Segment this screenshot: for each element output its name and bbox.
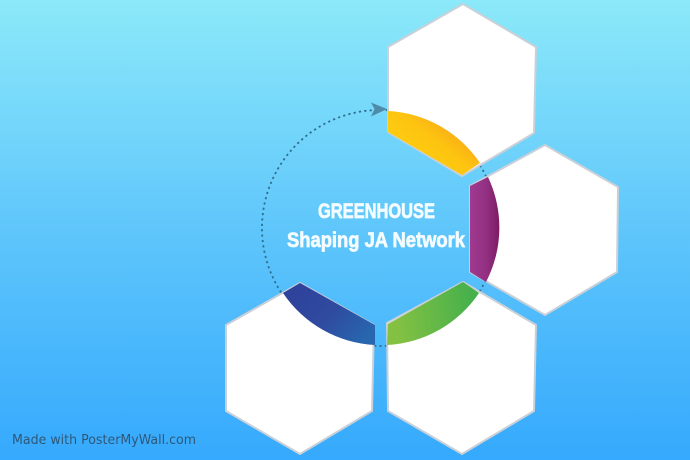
- hexagon: bottom left: [226, 283, 374, 454]
- subtitle: Shaping JA Network: [287, 229, 465, 252]
- footer watermark: Made with PosterMyWall.com: [12, 432, 196, 448]
- segment: yellow: [388, 111, 480, 175]
- hexagon: right: [470, 145, 618, 315]
- hexagon: bottom right: [387, 282, 536, 454]
- title: GREENHOUSE: [318, 200, 435, 223]
- segment: blue: [283, 283, 375, 345]
- segment: purple: [470, 177, 499, 282]
- hexagon: top: [388, 4, 536, 176]
- icon: arrow head: [371, 102, 387, 116]
- segment: green: [387, 282, 479, 345]
- dotted cycle arrow: [262, 102, 498, 346]
- title: [287, 200, 465, 252]
